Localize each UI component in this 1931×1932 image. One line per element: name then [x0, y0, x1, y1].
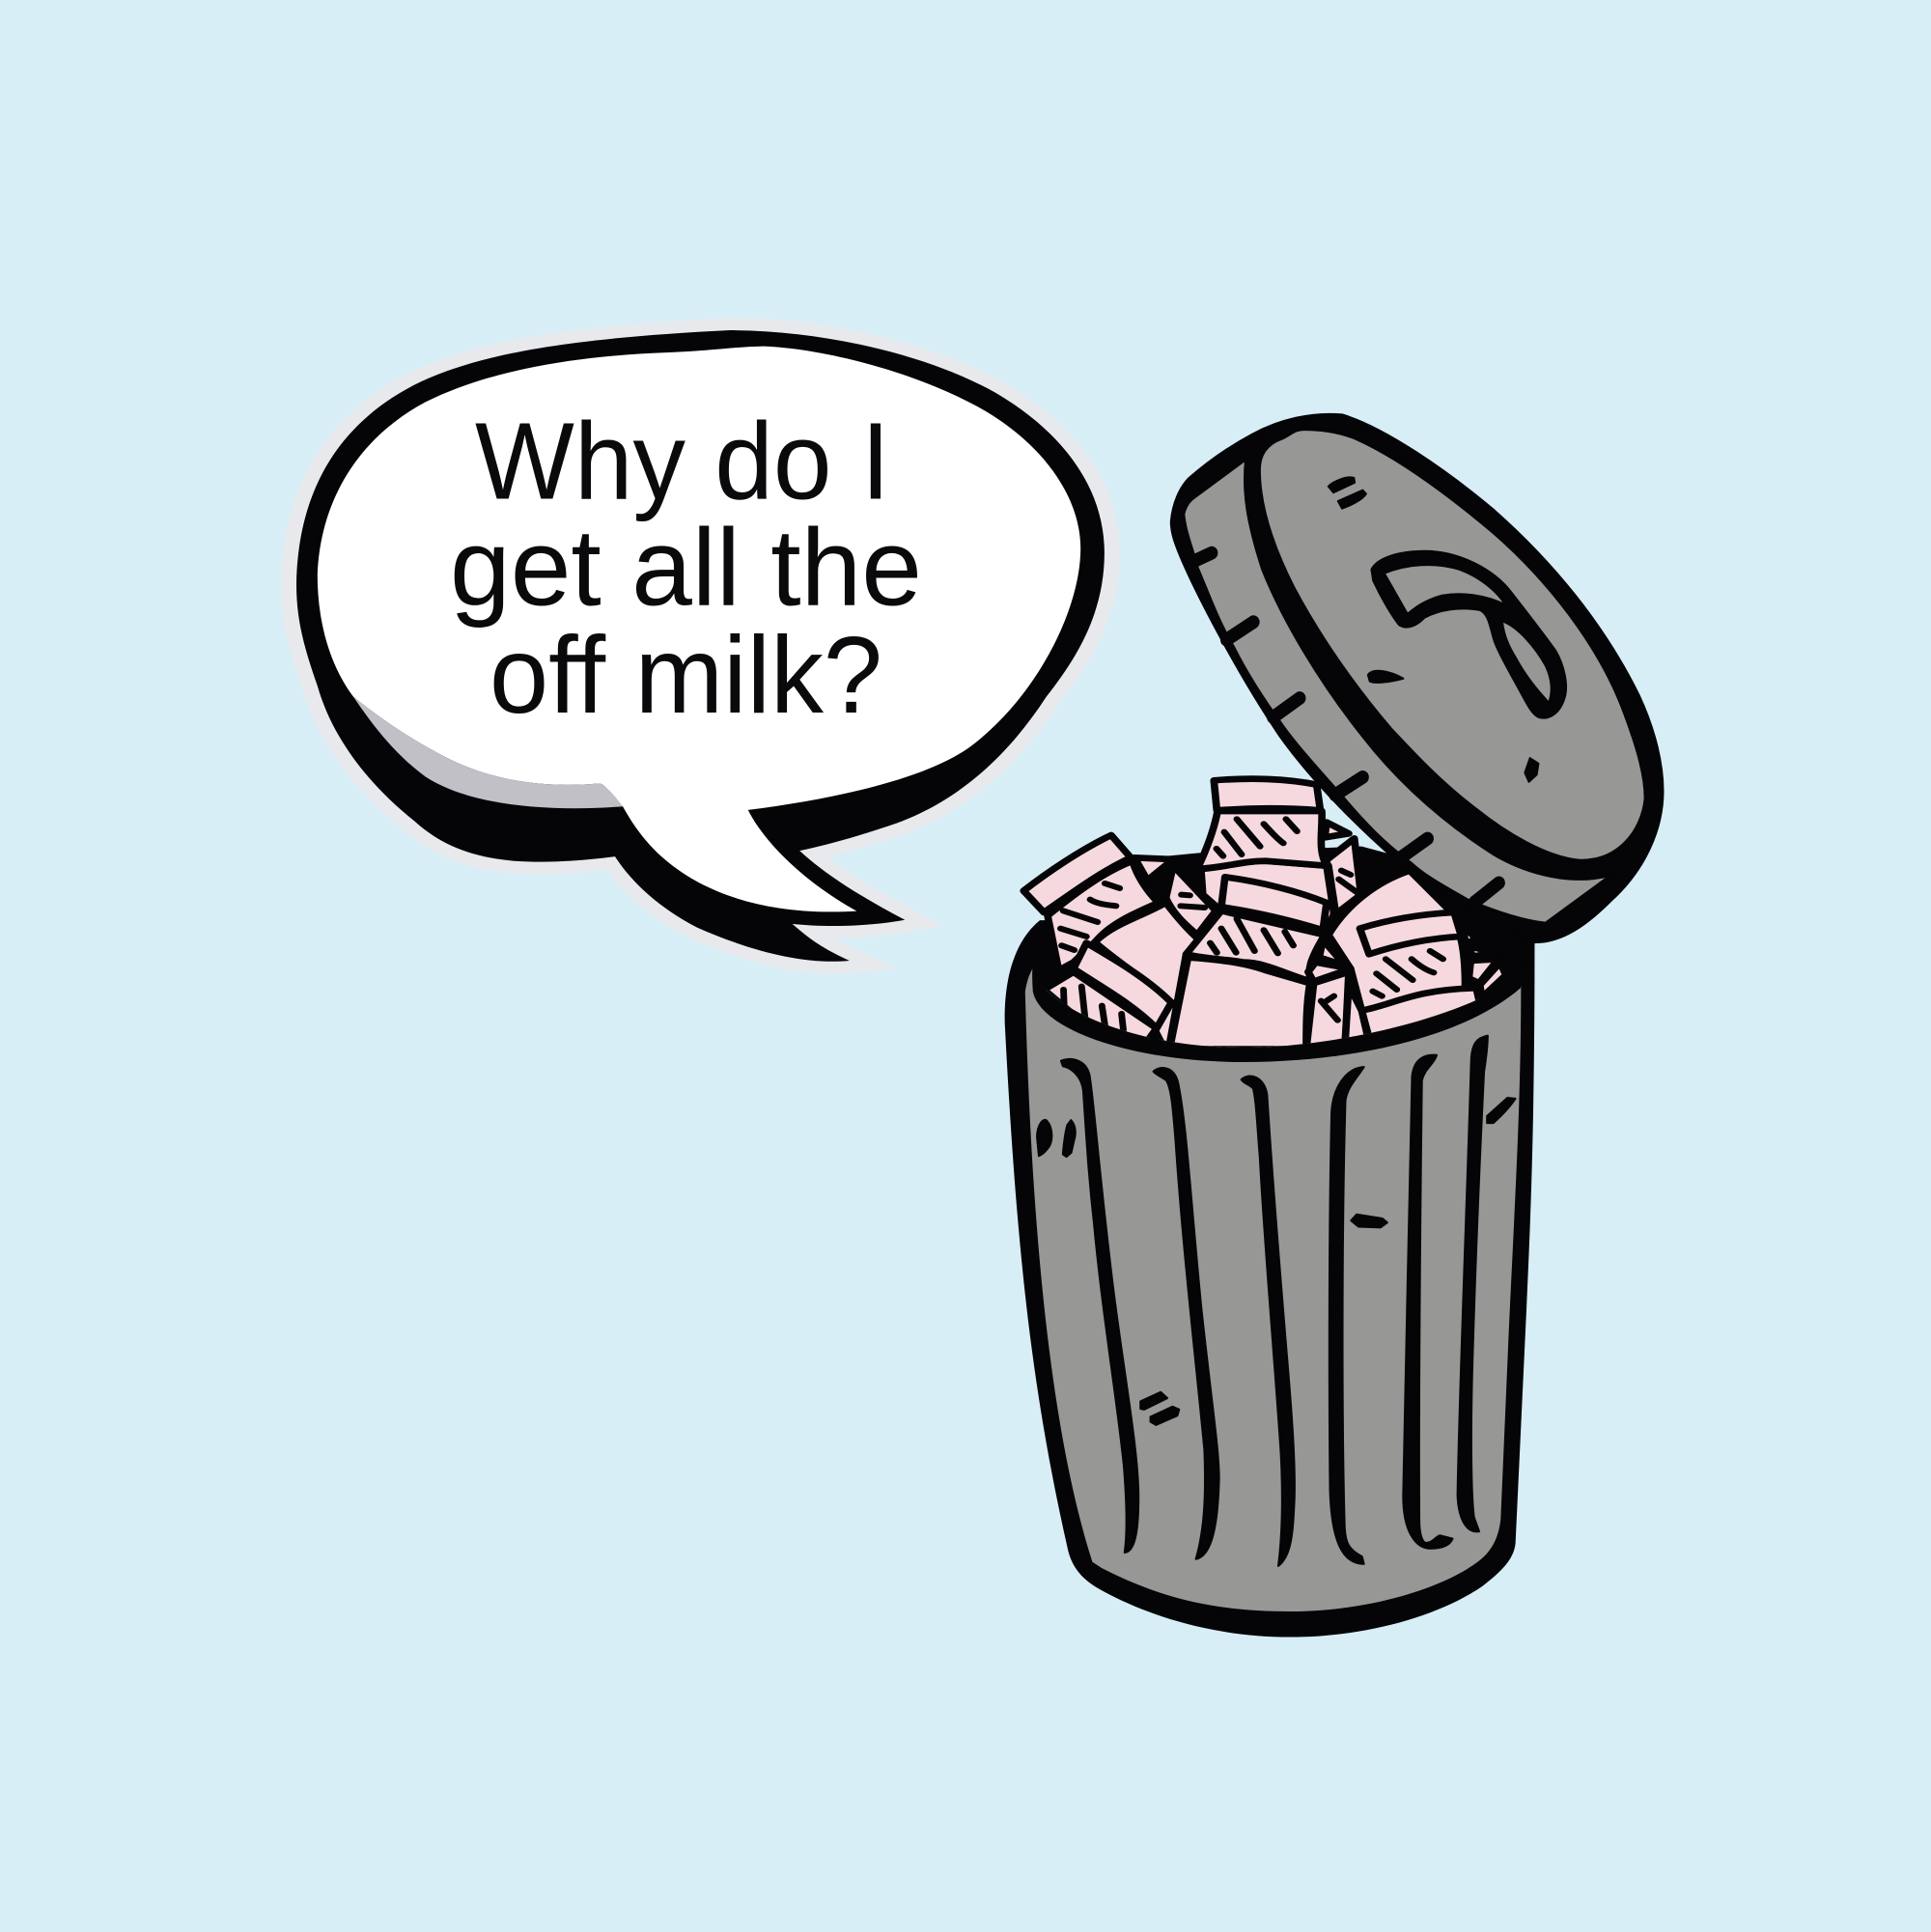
carton: middle small	[1170, 873, 1211, 931]
bubble grey inner shadow	[353, 697, 623, 808]
can ribs	[1037, 1036, 1516, 1566]
lid handle	[1371, 551, 1566, 718]
bubble text: Why do I	[475, 400, 890, 521]
carton: right large	[1329, 871, 1506, 1040]
trash can	[1005, 847, 1535, 1638]
bubble halo outline	[296, 330, 1105, 962]
bubble black outline and drop shadow	[296, 330, 1105, 962]
lid rim ticks	[1192, 553, 1498, 902]
bubble white interior	[318, 347, 1080, 911]
lid black outline	[1171, 414, 1663, 942]
carton: top centre	[1197, 779, 1361, 914]
lid top face	[1259, 429, 1645, 860]
speech bubble	[296, 330, 1105, 962]
carton: left tilted	[1023, 835, 1159, 970]
bubble text	[450, 400, 922, 736]
bubble text: off milk?	[490, 614, 882, 736]
carton: lower left body	[1044, 903, 1199, 1045]
carton: centre	[1169, 877, 1369, 1050]
can rim opening	[1032, 847, 1526, 1062]
milk cartons in the can	[1023, 779, 1506, 1050]
can black body	[1005, 920, 1535, 1638]
carton: back small	[1133, 854, 1330, 918]
can grey body	[1025, 957, 1521, 1611]
lid marks	[1329, 477, 1539, 782]
bubble text: get all the	[450, 507, 922, 629]
lid rim	[1184, 459, 1612, 923]
trash can lid	[1171, 414, 1663, 942]
